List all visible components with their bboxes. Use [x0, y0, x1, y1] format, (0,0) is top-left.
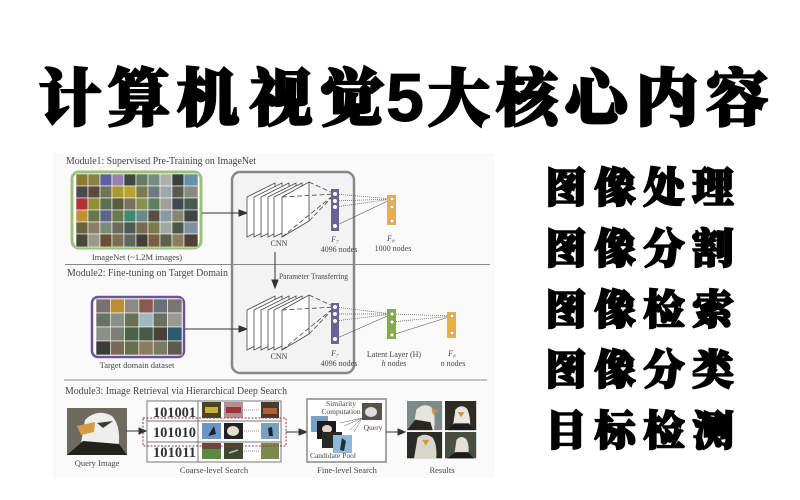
table: hash codes: [143, 401, 286, 462]
layer: F8 bottom: n nodes: [441, 359, 465, 368]
panel: network diagram: [53, 153, 495, 478]
label: fine-level search: Fine-level Search: [317, 465, 378, 475]
title: 视: [250, 66, 312, 134]
layer: F7 top: 4096 nodes: [321, 245, 357, 254]
panel: fine-level search: Query: [364, 423, 383, 432]
topic: image processing: 理: [692, 165, 734, 211]
topic: image classification: 分: [644, 347, 684, 393]
image grid: target domain dataset: [92, 297, 184, 357]
CNN stack: top: [247, 182, 335, 237]
topic: image retrieval: 像: [594, 287, 636, 333]
panel: fine-level search: Candidate Pool: [310, 451, 356, 460]
topic: image segmentation: 图: [546, 226, 586, 272]
title: 心: [565, 66, 637, 134]
list: core topics: [546, 165, 734, 454]
arrow: ImageNet to CNN: [202, 210, 247, 216]
CNN stack: bottom: [247, 295, 335, 350]
heading: module 2: Module2: Fine-tuning on Target Domain: [67, 268, 229, 279]
arrow: table to fine search: [286, 429, 307, 435]
layer: F7 bottom: 4096 nodes: [321, 359, 357, 368]
topic: object detection: [546, 408, 734, 454]
heading: module 1: Module1: Supervised Pre-Training on ImageNet: [66, 156, 256, 167]
title: 大: [428, 66, 490, 134]
arrow: query to table: [126, 428, 146, 434]
title: 内: [636, 66, 698, 134]
topic: image retrieval: 检: [644, 287, 684, 333]
topic: object detection: 检: [644, 408, 684, 454]
layer: F8 bottom: [441, 312, 465, 368]
arrow: fine search to results: [386, 429, 405, 435]
topic: object detection: 标: [594, 408, 640, 454]
layer: F7 top: [321, 189, 357, 254]
title: 算: [108, 65, 170, 134]
topic: image retrieval: [546, 287, 734, 333]
topic: image processing: 处: [644, 165, 688, 211]
panel: shared CNN box: [232, 172, 354, 373]
topic: image segmentation: [546, 226, 734, 272]
topic: image classification: [546, 347, 734, 393]
topic: image processing: [546, 165, 734, 211]
table: hash codes: 101010: [153, 425, 196, 441]
title: 觉: [321, 65, 384, 134]
table: hash codes: 101001: [153, 405, 196, 421]
topic: image segmentation: 割: [692, 226, 734, 272]
label: results: Results: [429, 465, 455, 475]
arrow: target to CNN: [185, 326, 247, 332]
topic: image classification: 类: [692, 347, 734, 393]
label: parameter transferring: Parameter Transferring: [279, 272, 348, 281]
label: target domain: Target domain dataset: [100, 360, 175, 370]
layer: latent: Latent Layer (H): [367, 350, 421, 359]
image grid: ImageNet samples: [72, 172, 201, 248]
table: hash codes: 101011: [153, 445, 196, 461]
label: query image: Query Image: [75, 458, 120, 468]
title: 核: [496, 66, 564, 134]
panel: fine-level search: [307, 399, 386, 462]
topic: image segmentation: 像: [594, 226, 636, 272]
layer: F7 bottom: F₇: [330, 349, 339, 358]
label: ImageNet: ImageNet (~1.2M images): [92, 252, 182, 262]
layer: F8 top: 1000 nodes: [375, 244, 411, 253]
label: CNN top: CNN: [271, 239, 288, 248]
topic: object detection: 目: [546, 408, 586, 454]
topic: image classification: 像: [594, 347, 636, 393]
topic: image retrieval: 图: [546, 287, 586, 333]
topic: image classification: 图: [546, 347, 586, 393]
title: 容: [706, 64, 768, 134]
topic: image processing: 像: [594, 165, 636, 211]
title: [39, 60, 768, 136]
title: 5: [386, 60, 424, 136]
layer: latent: [367, 309, 421, 368]
layer: latent: h nodes: [382, 359, 406, 368]
title: 计: [39, 66, 101, 134]
connections: bottom row: [335, 307, 452, 322]
images: results: [407, 401, 476, 458]
layer: F8 bottom: F₈: [447, 349, 456, 358]
layer: F8 top: [375, 195, 411, 253]
layer: F7 bottom: [321, 303, 357, 368]
topic: image segmentation: 分: [644, 226, 684, 272]
arrow: parameter transferring: [272, 252, 278, 288]
layer: F7 top: F₇: [330, 235, 339, 244]
topic: object detection: 测: [692, 408, 734, 454]
image: query eagle: [67, 408, 127, 455]
panel: fine-level search: Similarity: [326, 399, 356, 408]
layer: F8 top: F₈: [386, 234, 395, 243]
heading: module 3: Module3: Image Retrieval via Hierarchical Deep Search: [65, 386, 288, 397]
topic: image processing: 图: [546, 165, 586, 211]
panel: fine-level search: Computation: [321, 407, 361, 416]
title: 机: [177, 66, 239, 134]
label: CNN bottom: CNN: [271, 352, 288, 361]
topic: image retrieval: 索: [690, 287, 734, 333]
label: coarse-level search: Coarse-level Search: [180, 465, 249, 475]
connections: top row: [335, 194, 392, 207]
